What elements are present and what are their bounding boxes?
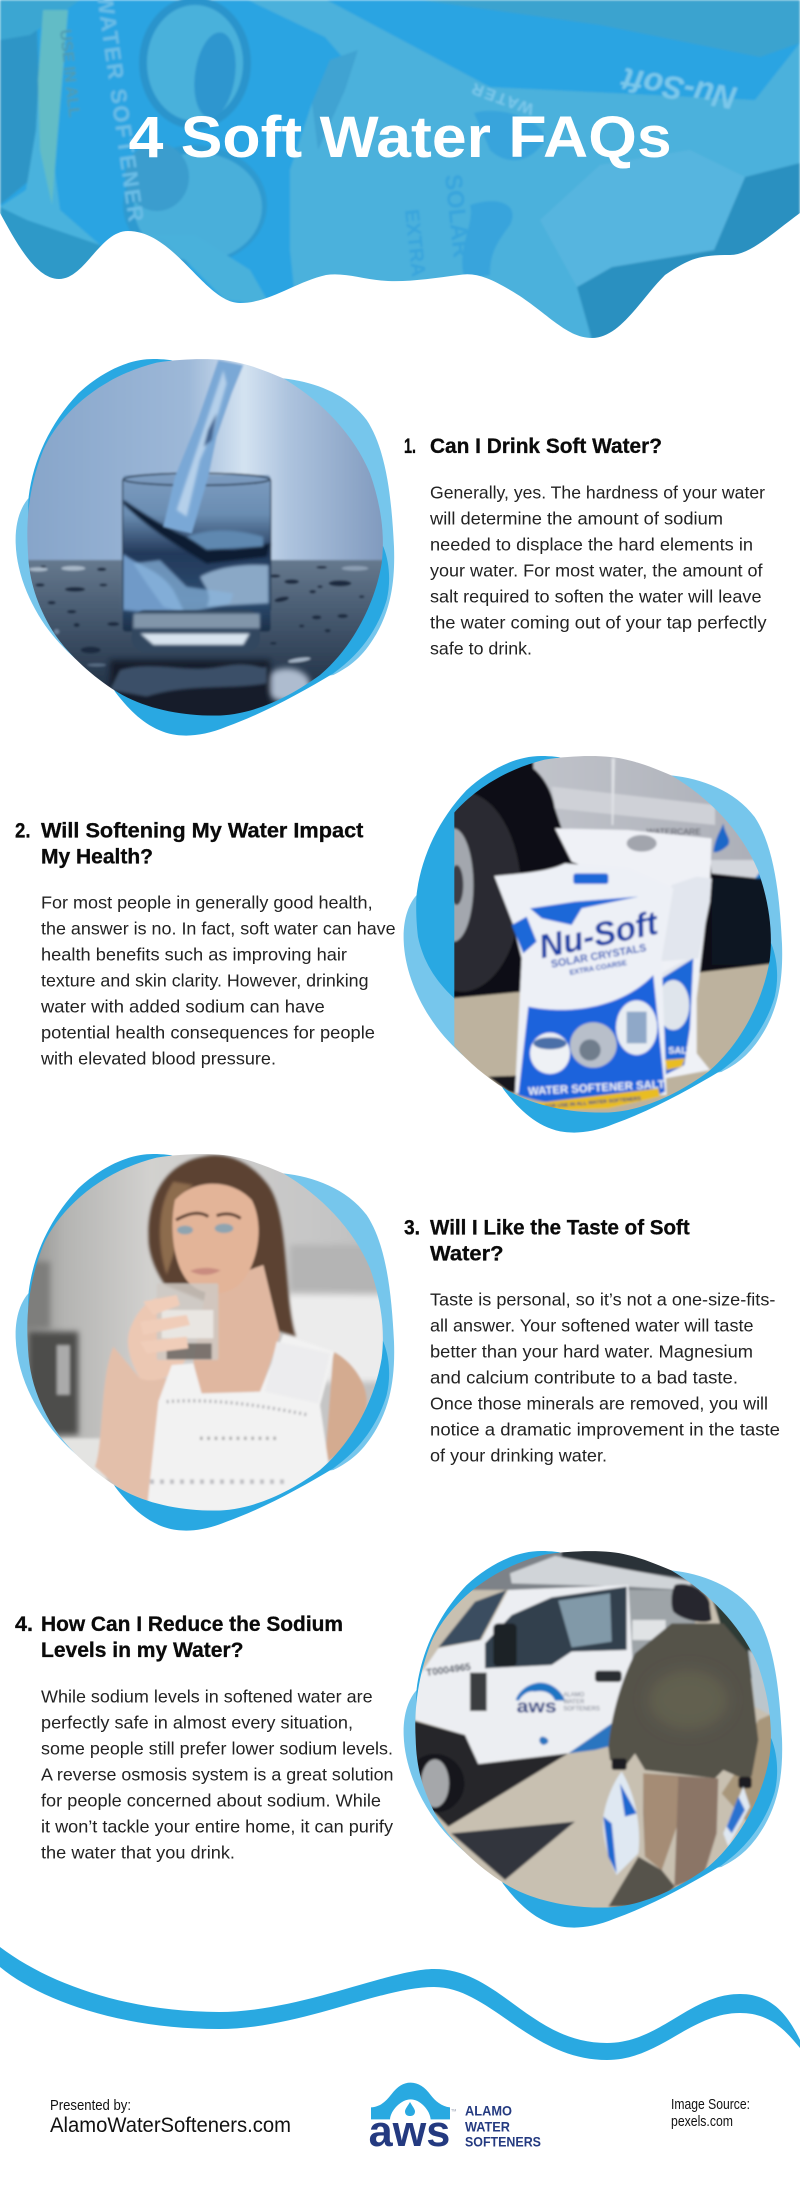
image blob: technician carrying salt bags from service truck: T0004965 bbox=[426, 1662, 472, 1679]
image blob: technician carrying salt bags from service truck: SOFTENERS bbox=[563, 1707, 600, 1713]
image blob: technician carrying salt bags from service truck: ALAMO bbox=[563, 1693, 585, 1699]
title: 4 Soft Water FAQs bbox=[129, 105, 672, 170]
body text: perfectly safe in almost every situation, bbox=[41, 1712, 353, 1732]
body text: salt required to soften the water will leave bbox=[430, 586, 762, 606]
heading bbox=[15, 1613, 343, 1662]
panel: FAQ 2 bbox=[15, 752, 782, 1133]
body text: and calcium contribute to a bad taste. bbox=[430, 1368, 738, 1388]
image blob: bags of water softener salt: Nu-Soft bbox=[536, 905, 663, 966]
heading: 3. bbox=[404, 1216, 420, 1239]
header photo background: SOLAR bbox=[439, 173, 475, 259]
heading bbox=[404, 1216, 690, 1265]
image blob: bags of water softener salt bbox=[402, 752, 782, 1133]
image blob: bags of water softener salt: WATER SOFTENER SALT bbox=[528, 1079, 665, 1098]
footer bbox=[50, 2083, 750, 2156]
image source bbox=[671, 2097, 750, 2130]
body text: Taste is personal, so it’s not a one-size-fits- bbox=[430, 1290, 776, 1310]
body text: your water. For most water, the amount of bbox=[430, 560, 763, 580]
logo: Alamo Water Softeners: ALAMO bbox=[465, 2103, 512, 2119]
logo: Alamo Water Softeners bbox=[369, 2083, 541, 2156]
heading: 2. bbox=[15, 819, 30, 842]
body text: safe to drink. bbox=[430, 638, 532, 658]
image source: Image Source: bbox=[671, 2097, 750, 2113]
header photo background: WATER bbox=[468, 78, 536, 117]
presented by: AlamoWaterSofteners.com bbox=[50, 2114, 291, 2137]
logo: Alamo Water Softeners: SOFTENERS bbox=[465, 2134, 541, 2150]
header banner bbox=[0, 0, 800, 345]
panel: FAQ 4 bbox=[15, 1547, 782, 1928]
body text: texture and skin clarity. However, drinking bbox=[41, 970, 368, 990]
header photo background: Nu-Soft bbox=[618, 61, 739, 117]
heading: How Can I Reduce the Sodium bbox=[41, 1613, 343, 1636]
logo: Alamo Water Softeners: WATER bbox=[465, 2118, 510, 2134]
body text bbox=[430, 1290, 780, 1466]
header photo background: EXTRA bbox=[400, 208, 429, 278]
image blob: technician carrying salt bags from service truck: aws bbox=[517, 1696, 557, 1717]
heading: 4. bbox=[15, 1613, 33, 1636]
heading: Water? bbox=[430, 1242, 504, 1265]
body text: with elevated blood pressure. bbox=[40, 1048, 276, 1068]
body text: A reverse osmosis system is a great solution bbox=[41, 1764, 394, 1784]
body text: needed to displace the hard elements in bbox=[430, 534, 753, 554]
body text: water with added sodium can have bbox=[40, 996, 325, 1016]
body text bbox=[40, 892, 396, 1068]
body text bbox=[41, 1686, 394, 1862]
body text: of your drinking water. bbox=[430, 1446, 607, 1466]
image blob: water poured into glass bbox=[16, 353, 394, 736]
image blob: bags of water softener salt: EXTRA COARSE bbox=[569, 958, 628, 977]
panel: FAQ 1 bbox=[16, 353, 767, 736]
body text: it won’t tackle your entire home, it can purify bbox=[41, 1816, 393, 1836]
body text: some people still prefer lower sodium levels. bbox=[41, 1738, 393, 1758]
heading: My Health? bbox=[41, 845, 153, 868]
header photo background: USE IN ALL bbox=[56, 29, 82, 118]
image blob: technician carrying salt bags from service truck: WATER bbox=[563, 1699, 585, 1705]
heading: Will Softening My Water Impact bbox=[41, 819, 363, 842]
body text: the water coming out of your tap perfectly bbox=[430, 612, 767, 632]
image blob: technician carrying salt bags from service truck bbox=[404, 1547, 782, 1928]
logo: Alamo Water Softeners: aws bbox=[369, 2107, 450, 2156]
image blob: bags of water softener salt: WATERCARE bbox=[647, 826, 701, 836]
heading: Levels in my Water? bbox=[41, 1639, 244, 1662]
image blob: bags of water softener salt: FOR USE IN ALL WATER SOFTENERS bbox=[545, 1096, 642, 1110]
heading: Will I Like the Taste of Soft bbox=[430, 1216, 690, 1239]
heading: Can I Drink Soft Water? bbox=[430, 435, 662, 458]
presented by: Presented by: bbox=[50, 2097, 131, 2114]
image source: pexels.com bbox=[671, 2114, 733, 2130]
body text: better than your hard water. Magnesium bbox=[430, 1342, 753, 1362]
body text: While sodium levels in softened water are bbox=[41, 1686, 373, 1706]
header photo background bbox=[0, 0, 800, 345]
body text: will determine the amount of sodium bbox=[429, 508, 723, 528]
body text: potential health consequences for people bbox=[41, 1022, 375, 1042]
body text: all answer. Your softened water will taste bbox=[430, 1316, 754, 1336]
presented by bbox=[50, 2097, 291, 2137]
body text: the water that you drink. bbox=[41, 1842, 235, 1862]
panel: FAQ 3 bbox=[16, 1148, 780, 1531]
body text: For most people in generally good health, bbox=[41, 892, 373, 912]
body text: health benefits such as improving hair bbox=[41, 944, 347, 964]
body text: Once those minerals are removed, you will bbox=[430, 1394, 768, 1414]
body text bbox=[429, 482, 767, 658]
image blob: woman drinking water bbox=[16, 1148, 394, 1531]
heading bbox=[15, 819, 363, 868]
logo: Alamo Water Softeners: TM bbox=[451, 2109, 456, 2113]
body text: Generally, yes. The hardness of your water bbox=[430, 482, 765, 502]
body text: notice a dramatic improvement in the taste bbox=[430, 1420, 780, 1440]
image blob: bags of water softener salt: SOLAR CRYSTALS bbox=[550, 942, 647, 971]
image blob: bags of water softener salt: SALT bbox=[668, 1045, 692, 1055]
decorative wave ribbon bbox=[0, 1947, 800, 2060]
body text: the answer is no. In fact, soft water can have bbox=[41, 918, 396, 938]
body text: for people concerned about sodium. While bbox=[41, 1790, 381, 1810]
heading: 1. bbox=[404, 435, 416, 458]
